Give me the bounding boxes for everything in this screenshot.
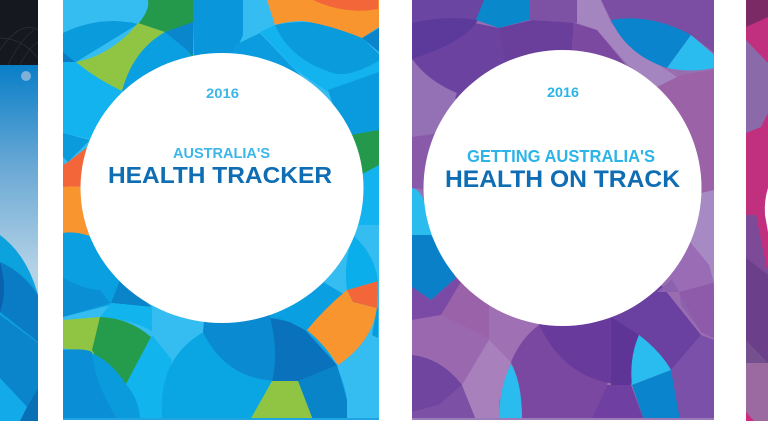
panel: Australia's Health Tracker cover [63, 0, 380, 420]
cover 1 year: 2016 [206, 85, 239, 101]
cover 1 artwork [63, 0, 380, 420]
cover 2 title line 1: GETTING AUSTRALIA'S [467, 146, 655, 166]
white circle [424, 50, 702, 326]
panel: partial cover at left edge [0, 0, 38, 421]
cover 2 title line 2: HEALTH ON TRACK [445, 166, 681, 193]
cover 2 artwork [412, 0, 714, 420]
icon: small circle badge [21, 71, 31, 81]
white circle [80, 53, 364, 323]
panel: Getting Australia's Health On Track cover [412, 0, 714, 420]
cover 1 title line 1: AUSTRALIA'S [173, 145, 270, 162]
panel: partial cover at right edge [746, 0, 768, 421]
cover 2 year: 2016 [547, 84, 579, 100]
cover 1 title line 2: HEALTH TRACKER [108, 162, 332, 188]
